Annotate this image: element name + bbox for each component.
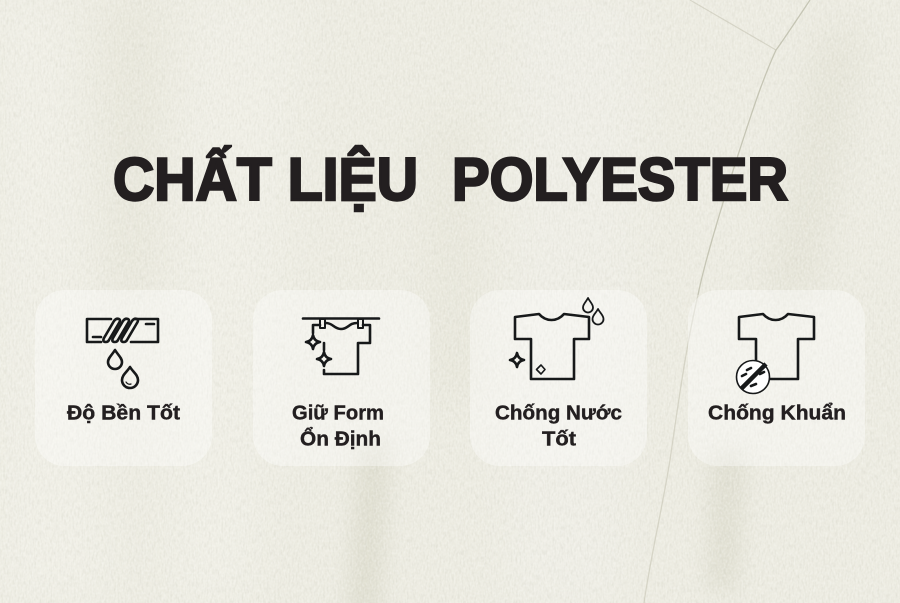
icon: t-shirt with antibacterial badge	[736, 314, 814, 394]
title	[113, 146, 788, 213]
label line two: Ổn Định	[300, 426, 381, 450]
panel: giữ form ổn định	[253, 290, 430, 466]
card background	[253, 290, 430, 466]
label line one: Giữ Form	[292, 402, 384, 424]
icon: shirt on clothesline	[303, 318, 379, 374]
icon: t-shirt with water drops	[510, 298, 604, 379]
card background	[470, 290, 647, 466]
panel: độ bền tốt	[35, 290, 212, 466]
card background	[35, 290, 212, 466]
panel: chống nước tốt	[470, 290, 647, 466]
label line one: Chống Nước	[495, 402, 622, 424]
card background	[688, 290, 865, 466]
title: POLYESTER	[452, 146, 788, 213]
title: CHẤT LIỆU	[113, 146, 418, 213]
label line two: Tốt	[542, 428, 576, 450]
label: Chống Khuẩn	[708, 402, 846, 424]
panel: chống khuẩn	[688, 290, 865, 466]
icon: twisted fabric and water drops	[87, 319, 158, 388]
label: Độ Bền Tốt	[67, 402, 180, 424]
